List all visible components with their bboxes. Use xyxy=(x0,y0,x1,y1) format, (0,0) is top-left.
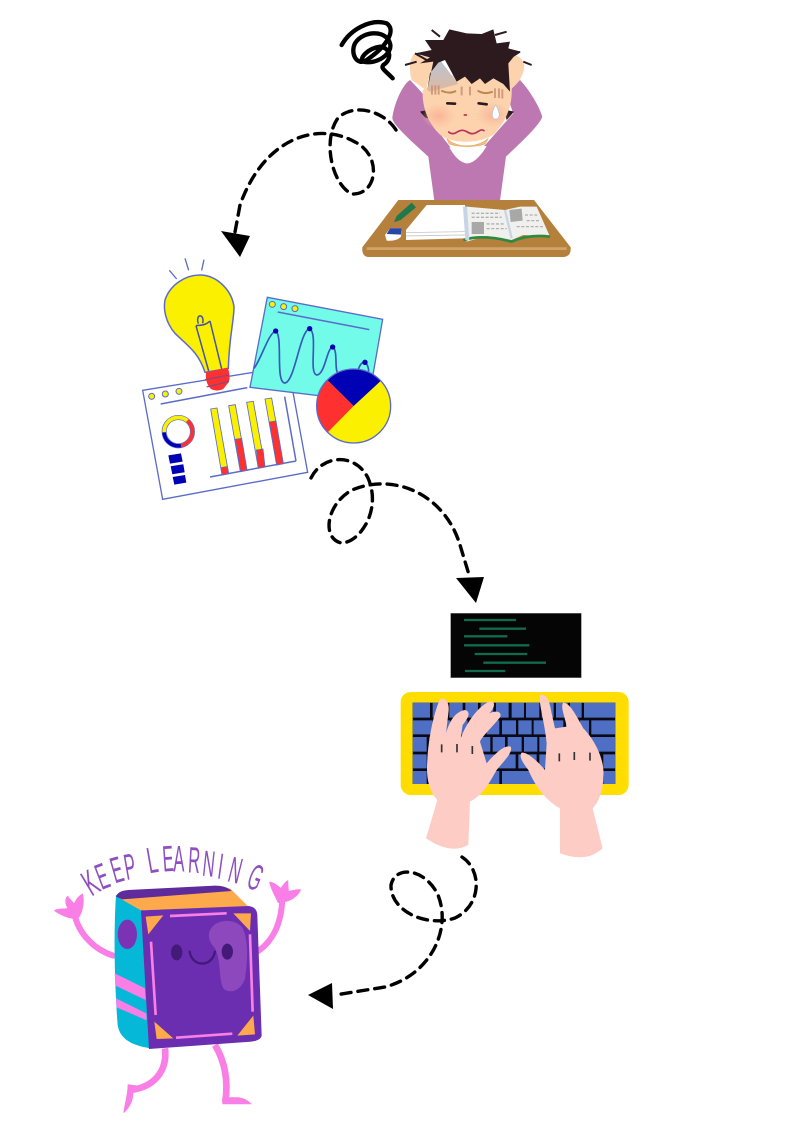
book cover xyxy=(141,906,262,1049)
face xyxy=(171,944,233,964)
spine bands xyxy=(115,973,147,1020)
keys xyxy=(413,703,615,784)
arrowhead xyxy=(308,983,333,1009)
icon: scribble of frustration xyxy=(342,22,393,78)
legs xyxy=(130,1045,226,1102)
heading: keep learning: A xyxy=(173,839,184,881)
arrow: dashed loop from keyboard to book xyxy=(308,857,476,1009)
cover lines xyxy=(151,913,253,1038)
legend squares xyxy=(168,453,186,485)
heading: keep learning: K xyxy=(75,863,107,904)
feet xyxy=(123,1084,252,1113)
illustration: lightbulb and data charts xyxy=(143,258,391,499)
illustration: happy book character xyxy=(55,839,300,1113)
heading: keep learning: N xyxy=(224,850,246,893)
open book xyxy=(406,205,467,240)
lightbulb xyxy=(164,258,234,391)
hands in hair xyxy=(410,53,524,90)
bars xyxy=(211,398,283,475)
illustration: stressed student at desk xyxy=(342,22,571,257)
book top pages xyxy=(117,888,248,910)
desk xyxy=(362,200,571,257)
sweat drop xyxy=(492,105,499,119)
heading: keep learning: P xyxy=(121,846,139,889)
neck xyxy=(447,138,488,146)
arrowhead xyxy=(456,577,484,603)
face xyxy=(423,67,512,142)
hair xyxy=(415,29,521,92)
spine circle xyxy=(118,920,137,949)
corner triangles xyxy=(146,913,255,1039)
arrow: dashed loop from charts to keyboard xyxy=(311,460,484,603)
heading: keep learning xyxy=(75,839,269,904)
hands xyxy=(55,881,300,918)
forehead strokes xyxy=(432,85,502,99)
left hand xyxy=(426,699,511,849)
heading: keep learning: L xyxy=(144,840,161,882)
sweater xyxy=(392,80,542,201)
line chart window xyxy=(250,297,383,402)
bulb base xyxy=(206,368,230,391)
heading: keep learning: E xyxy=(106,849,128,892)
cheeks xyxy=(422,102,510,129)
heading: keep learning: R xyxy=(187,840,201,882)
pie chart xyxy=(317,369,391,443)
code screen xyxy=(451,613,581,678)
pen xyxy=(394,203,416,222)
collar xyxy=(449,146,487,163)
book spine xyxy=(115,895,150,1048)
book pictures and text xyxy=(472,209,523,234)
arrowhead xyxy=(221,231,250,257)
eraser xyxy=(385,228,402,241)
code lines xyxy=(464,620,546,671)
arrow: dashed loop from student to charts xyxy=(221,110,396,257)
heading: keep learning: I xyxy=(215,846,226,888)
chart window with bars xyxy=(143,367,308,499)
keyboard xyxy=(401,692,629,795)
arms xyxy=(75,898,282,956)
ears and side hair xyxy=(420,109,514,120)
illustration: hands typing code on keyboard xyxy=(401,613,629,857)
heading: keep learning: E xyxy=(90,856,115,898)
window dots xyxy=(149,388,182,399)
heading: keep learning: N xyxy=(201,844,217,886)
heading: keep learning: E xyxy=(161,839,175,881)
stray hair strands xyxy=(405,30,532,65)
donut chart xyxy=(162,415,195,448)
gloom lines on forehead xyxy=(427,60,458,92)
wave line xyxy=(254,329,369,383)
eyes, brows, mouth xyxy=(442,91,492,134)
right hand xyxy=(521,695,603,857)
light rays xyxy=(169,258,204,279)
heading: keep learning: G xyxy=(242,857,269,900)
cover shine xyxy=(209,921,247,991)
